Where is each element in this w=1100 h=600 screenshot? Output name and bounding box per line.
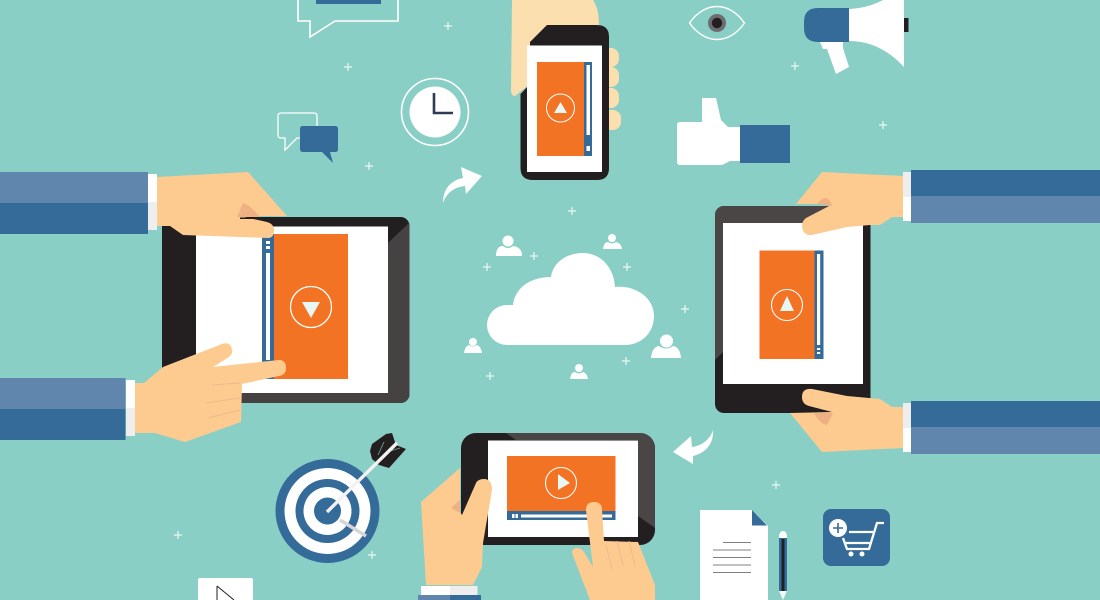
dart feathers xyxy=(370,433,406,468)
hand holding phone xyxy=(511,0,599,96)
lower hand pointing xyxy=(135,343,286,442)
icon: chat bubbles xyxy=(278,113,338,163)
icon: target with arrow xyxy=(276,433,406,563)
tablet body xyxy=(162,217,410,403)
users around the cloud xyxy=(464,234,681,379)
phone fingers xyxy=(600,48,621,130)
icon: megaphone xyxy=(804,0,908,74)
play button xyxy=(290,286,332,328)
arrow: curved down left xyxy=(673,430,713,464)
icon: shopping cart xyxy=(823,509,890,566)
lower sleeve xyxy=(0,378,135,440)
phone body xyxy=(461,433,655,545)
arrow: curved up right xyxy=(443,167,482,203)
tablet screen xyxy=(723,223,863,384)
upper sleeve xyxy=(903,170,1100,223)
icon: thumbs up xyxy=(677,98,790,165)
left hand xyxy=(421,468,492,585)
upper hand xyxy=(796,172,903,235)
left tablet with hands xyxy=(0,172,410,442)
phone screen xyxy=(488,440,638,537)
tablet body xyxy=(715,206,871,413)
video panel xyxy=(537,62,584,156)
phone top with hand xyxy=(511,0,621,180)
decorative plus signs xyxy=(174,22,887,559)
shirt cuff and sleeve xyxy=(418,586,481,600)
right tablet with hands xyxy=(715,170,1100,454)
video panel xyxy=(507,456,616,511)
play button xyxy=(772,290,802,320)
central cloud xyxy=(487,253,654,345)
lower sleeve xyxy=(903,401,1100,454)
play button xyxy=(546,468,576,498)
icon: clock xyxy=(402,78,468,146)
upper sleeve xyxy=(0,172,157,234)
play button xyxy=(546,94,574,122)
icon: cursor card xyxy=(198,578,253,600)
video panel xyxy=(760,250,814,359)
bottom phone with hands xyxy=(418,433,655,600)
icon: eye xyxy=(690,6,744,40)
phone body xyxy=(520,25,609,180)
video panel xyxy=(274,234,348,379)
phone screen xyxy=(527,46,602,172)
icon: pencil xyxy=(779,531,787,600)
right hand pointing xyxy=(572,502,655,600)
upper hand xyxy=(157,172,287,238)
tablet screen xyxy=(196,226,388,393)
speech bubble top left xyxy=(298,0,398,37)
lower hand xyxy=(790,389,903,452)
icon: document xyxy=(700,510,768,600)
